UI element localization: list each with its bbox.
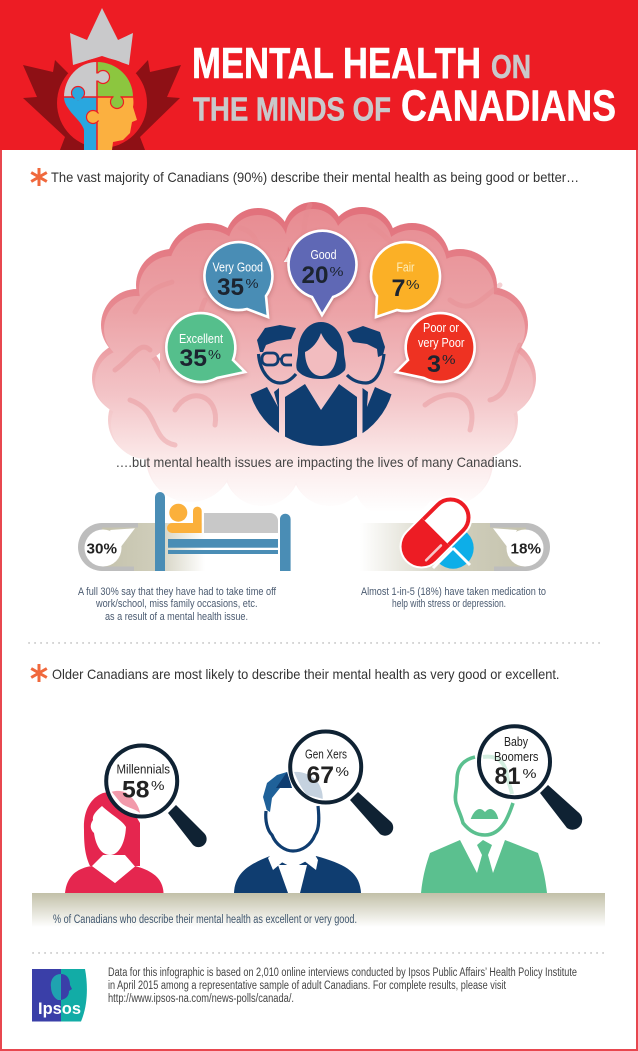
magnifier: Gen Xers 67%: % xyxy=(336,764,350,779)
caption: medication xyxy=(361,586,546,610)
title xyxy=(192,40,616,130)
brain background xyxy=(92,202,536,520)
bubble: Fair 7% xyxy=(371,242,440,317)
magnifier: Millennials 58%: Millennials xyxy=(116,762,170,776)
magnifier: Baby Boomers 81%: 81 xyxy=(494,763,520,790)
bubble: Fair 7%: Fair xyxy=(396,260,414,274)
asterisk bullet xyxy=(31,168,47,186)
stat badge: 30%: 30% xyxy=(86,540,117,558)
bubble: Very Good 35% xyxy=(204,242,272,317)
head: woman xyxy=(296,322,346,379)
methodology note xyxy=(108,967,577,1005)
logo: Ipsos: Ipsos xyxy=(38,999,81,1018)
caption: medication: help with stress or depression. xyxy=(392,598,506,610)
header banner xyxy=(0,0,638,150)
caption: time off: as a result of a mental health issue. xyxy=(105,611,248,623)
methodology note: http://www.ipsos-na.com/news-polls/canada/. xyxy=(108,993,294,1005)
bubble: Good 20% xyxy=(288,231,357,315)
people icon xyxy=(250,322,392,446)
magnifier: Gen Xers 67%: 67 xyxy=(306,762,334,789)
magnifier: Gen Xers 67% xyxy=(290,732,393,836)
magnifier: Baby Boomers 81%: % xyxy=(522,766,537,781)
body: right man xyxy=(362,387,392,434)
bubble: Good 20%: Good xyxy=(310,248,337,262)
stat badge: 18% xyxy=(360,523,550,571)
stat badge: 30% xyxy=(78,523,205,571)
magnifier: Millennials 58%: % xyxy=(151,778,165,793)
magnifier: Gen Xers 67%: Gen Xers xyxy=(305,748,347,762)
bubble: Good 20%: % xyxy=(330,264,344,279)
transition statement: ….but mental health issues are impacting the lives of many Canadians. xyxy=(116,454,522,470)
caption: time off: work/school, miss family occasions, etc. xyxy=(95,598,258,610)
intro statement: The vast majority of Canadians (90%) describe their mental health as being good or better… xyxy=(51,169,579,185)
bubble: Fair 7%: 7 xyxy=(392,275,406,302)
shelf caption: % of Canadians who describe their mental health as excellent or very good. xyxy=(53,914,357,926)
bubble: Poor or very Poor 3% xyxy=(396,313,475,382)
body: woman xyxy=(285,384,357,450)
bubble: Excellent 35%: 35 xyxy=(180,345,207,372)
section statement: Older Canadians are most likely to describe their mental health as very good or excellent. xyxy=(52,666,560,682)
stat badge: 18%: 18% xyxy=(510,540,541,558)
head: right man xyxy=(347,326,385,383)
asterisk bullet xyxy=(31,664,47,682)
bubble: Good 20%: 20 xyxy=(302,262,328,289)
magnifier: Millennials 58% xyxy=(106,746,207,847)
magnifier: Baby Boomers 81%: Boomers xyxy=(494,750,538,764)
title: ON xyxy=(491,49,531,86)
bubble: Excellent 35% xyxy=(166,313,245,382)
methodology note: in April 2015 among a representative sample of adult Canadians. For complete results, please visit xyxy=(108,980,507,992)
figure: Baby Boomer man xyxy=(421,726,582,893)
caption: time off xyxy=(78,586,277,623)
bubble: Poor or very Poor 3%: % xyxy=(442,352,456,367)
title: MENTAL HEALTH xyxy=(192,40,481,88)
magnifier: Millennials 58%: 58 xyxy=(122,776,150,804)
figure: Millennial woman xyxy=(65,746,207,893)
bubble: Poor or very Poor 3%: 3 xyxy=(427,351,441,378)
icon: pill and tablet xyxy=(390,486,482,578)
caption: time off: A full 30% say that they have had to take time off xyxy=(78,586,277,598)
icon: bed xyxy=(155,492,291,571)
bubble: Poor or very Poor 3%: Poor or xyxy=(423,321,459,335)
magnifier: Baby Boomers 81% xyxy=(479,726,582,830)
shelf xyxy=(32,893,605,927)
magnifier: Baby Boomers 81%: Baby xyxy=(504,735,529,749)
body: left man xyxy=(250,387,279,433)
bubble: Poor or very Poor 3%: very Poor xyxy=(418,336,464,350)
logo: Ipsos xyxy=(32,969,87,1022)
title: THE MINDS OF xyxy=(193,92,391,128)
bubble: Excellent 35%: % xyxy=(208,347,221,362)
bubble: Very Good 35%: 35 xyxy=(217,274,244,301)
bubble: Excellent 35%: Excellent xyxy=(179,332,223,346)
figure: Gen X man xyxy=(234,732,393,893)
logo: maple leaf puzzle head xyxy=(23,8,181,150)
bubble: Fair 7%: % xyxy=(406,277,420,292)
caption: medication: Almost 1-in-5 (18%) have taken medication to xyxy=(361,586,546,598)
bubble: Very Good 35%: Very Good xyxy=(212,260,263,274)
head: left man with glasses xyxy=(257,325,296,383)
bubble: Very Good 35%: % xyxy=(246,276,259,291)
